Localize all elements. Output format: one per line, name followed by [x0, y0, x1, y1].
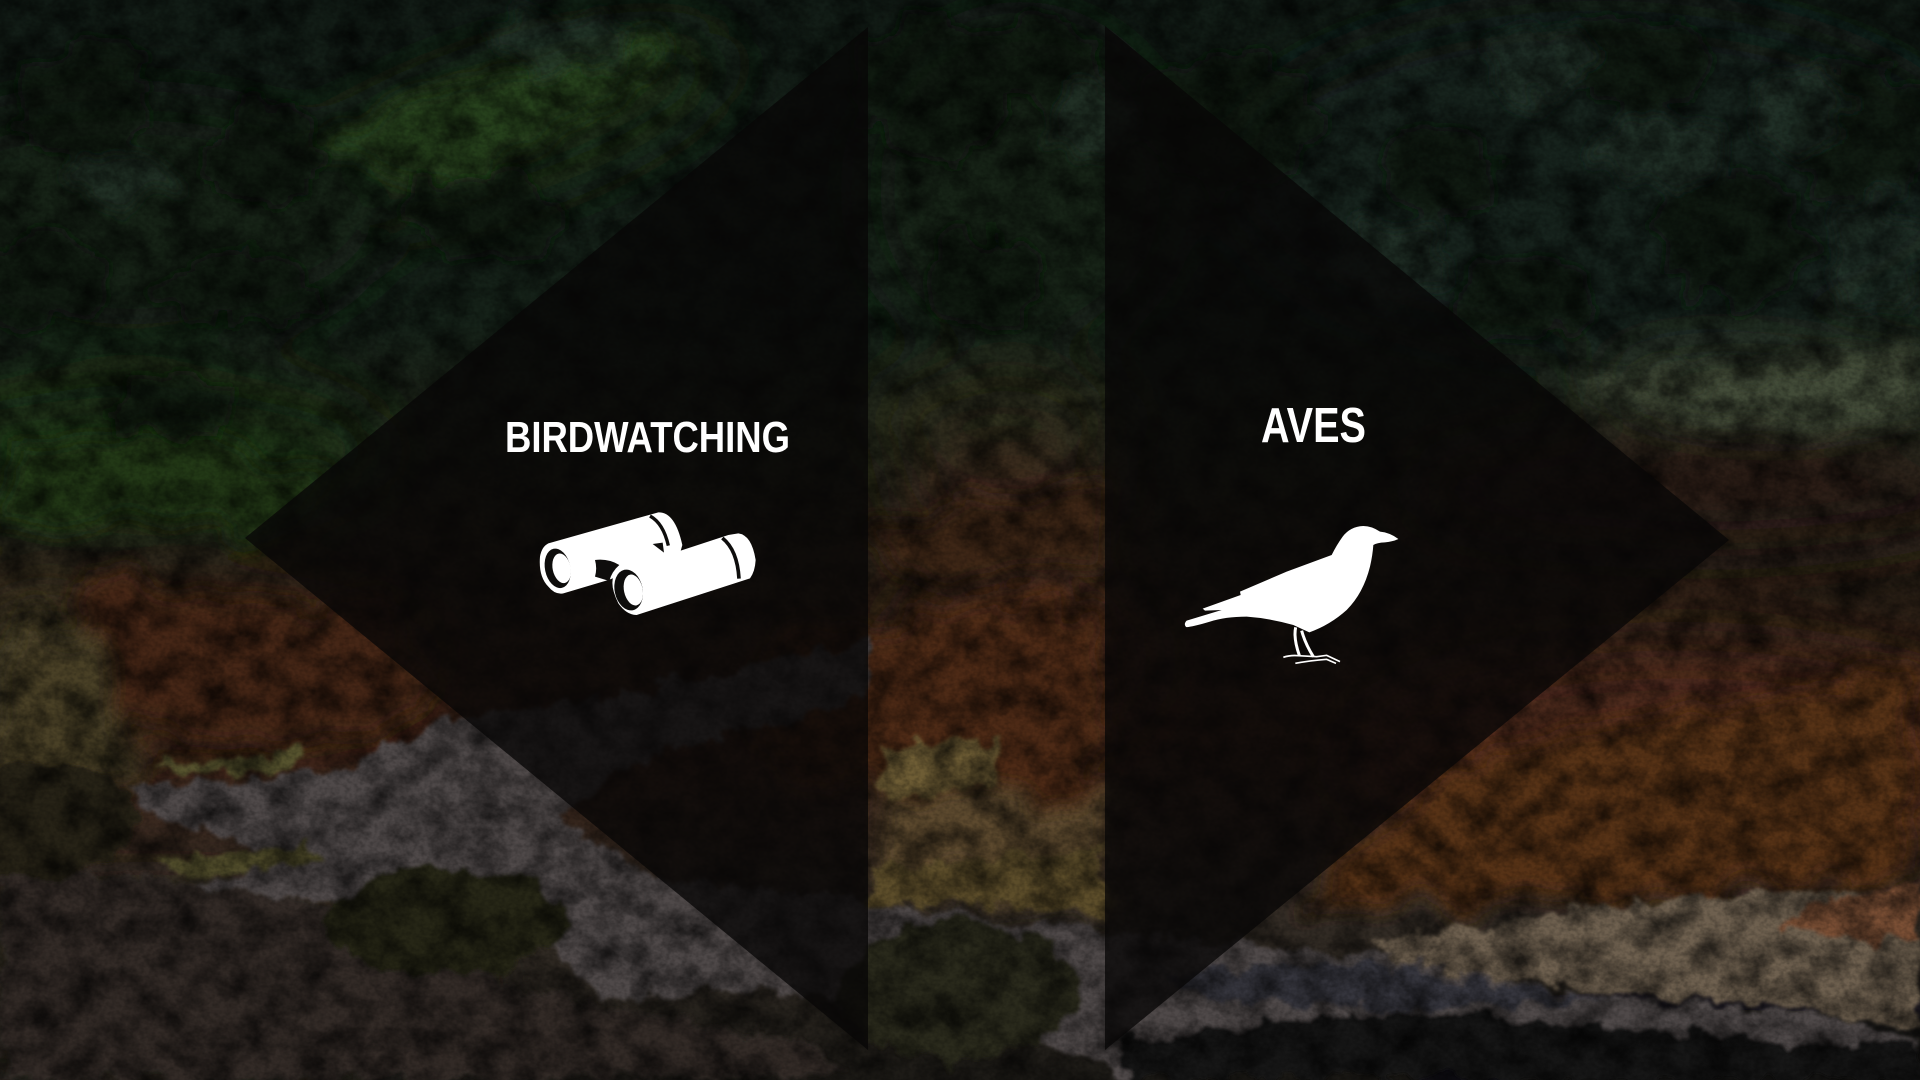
left triangle panel	[245, 27, 868, 1050]
tree clumps	[0, 10, 1920, 440]
right triangle panel	[1105, 26, 1729, 1050]
sand bars	[150, 750, 300, 775]
icon: binoculars	[540, 512, 756, 615]
foreground grass left	[0, 870, 850, 1080]
heading: birdwatching: BIRDWATCHING	[505, 413, 790, 462]
foreground shrubs	[325, 865, 565, 975]
dark pool	[1120, 1010, 1920, 1080]
river surface	[130, 640, 1920, 1080]
gravel bank	[1370, 890, 1920, 1030]
icon: bird silhouette	[1185, 526, 1398, 663]
heading: aves: AVES	[1261, 399, 1366, 453]
